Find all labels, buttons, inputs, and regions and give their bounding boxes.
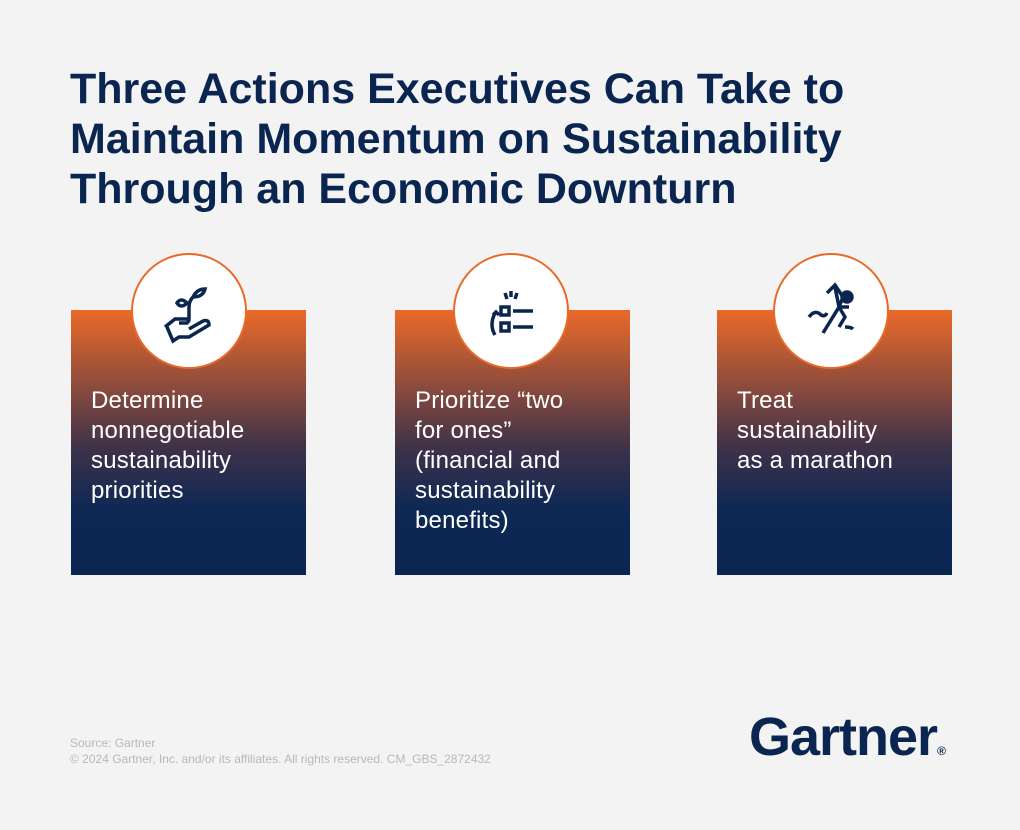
text: card 2: Prioritize “two — [415, 387, 563, 414]
panel: card 1 — [71, 310, 306, 575]
text: card 1: priorities — [91, 477, 184, 504]
text: card 2: sustainability — [415, 477, 555, 504]
text: card 1: Determine — [91, 387, 204, 414]
source text — [70, 736, 491, 766]
text: card 3: as a marathon — [737, 447, 893, 474]
text: card 3: sustainability — [737, 417, 877, 444]
panel: card 2 — [395, 310, 630, 575]
text: card 3: Treat — [737, 387, 793, 414]
title: Three Actions Executives Can Take to — [70, 65, 844, 113]
text: card 1: sustainability — [91, 447, 231, 474]
title — [70, 65, 844, 213]
text: card 1: nonnegotiable — [91, 417, 244, 444]
text: card 2: (financial and — [415, 447, 561, 474]
title: Maintain Momentum on Sustainability — [70, 115, 842, 163]
source text: © 2024 Gartner, Inc. and/or its affiliates. All rights reserved. CM_GBS_2872432 — [70, 752, 491, 766]
icon: checklist — [453, 253, 569, 369]
source text: Source: Gartner — [70, 736, 155, 750]
text: card 2 — [415, 387, 563, 534]
text: card 2: benefits) — [415, 507, 509, 534]
text: card 3 — [737, 387, 893, 474]
logo: Gartner® — [749, 707, 946, 767]
text: card 1 — [91, 387, 244, 504]
panel: card 3 — [717, 310, 952, 575]
icon: runner — [773, 253, 889, 369]
text: card 2: for ones” — [415, 417, 512, 444]
title: Through an Economic Downturn — [70, 165, 736, 213]
icon: hand with plant — [131, 253, 247, 369]
